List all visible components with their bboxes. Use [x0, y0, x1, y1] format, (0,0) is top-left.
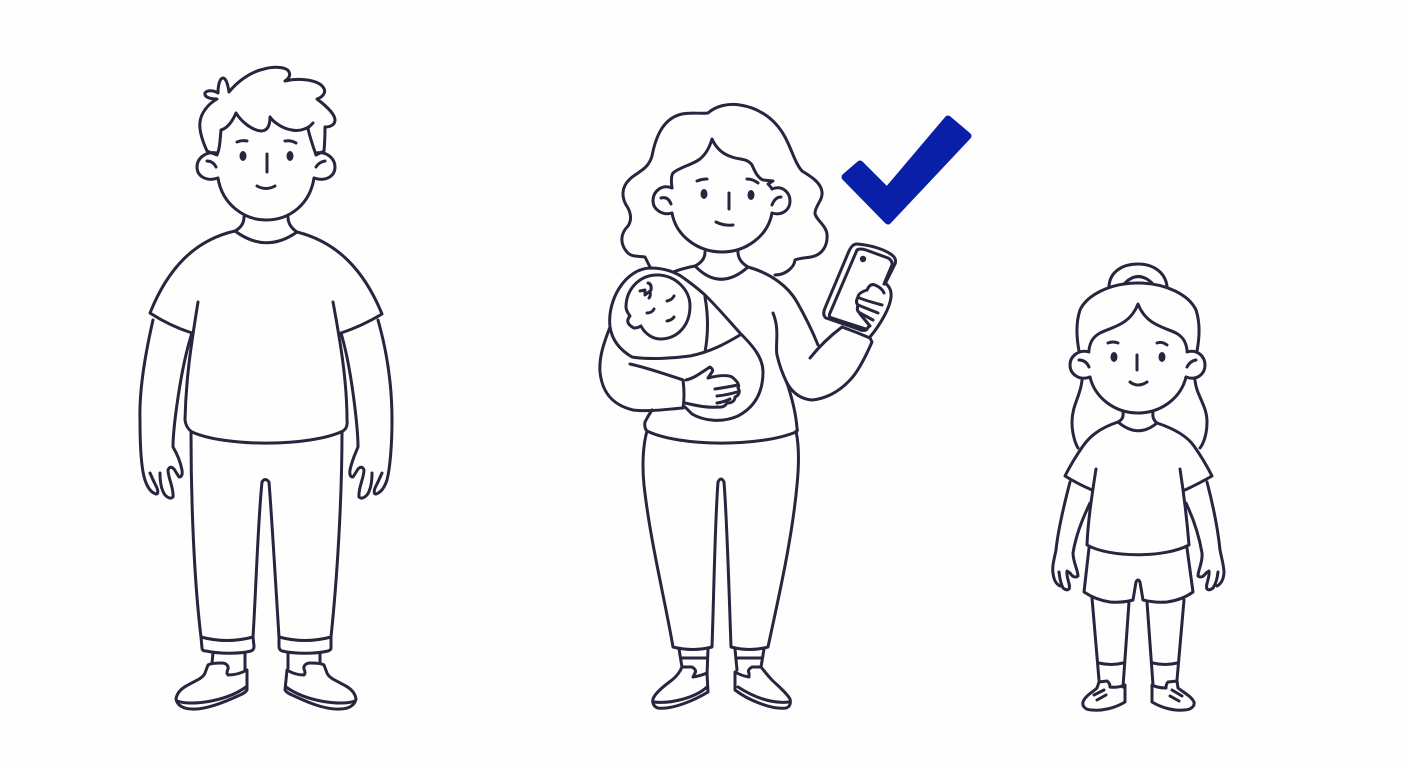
woman sweater — [645, 252, 842, 443]
man arms and hands — [140, 320, 392, 498]
man ears — [197, 153, 335, 179]
icon: blue check mark — [845, 119, 968, 221]
woman holding hand — [685, 367, 739, 407]
phone hand — [856, 283, 891, 337]
man trousers — [191, 432, 342, 653]
girl shorts — [1084, 548, 1193, 602]
baby wrap — [610, 268, 763, 420]
woman face — [672, 179, 772, 252]
man face — [218, 141, 314, 220]
man hair — [200, 67, 335, 155]
figure: man — [140, 67, 392, 709]
man t-shirt — [150, 217, 382, 443]
woman holding arm — [600, 327, 684, 411]
girl t-shirt — [1065, 413, 1212, 555]
girl ponytail — [1109, 264, 1167, 286]
woman socks and shoes — [653, 649, 790, 708]
woman raised forearm — [787, 327, 872, 400]
girl shoes — [1083, 681, 1194, 710]
girl legs and socks — [1092, 598, 1184, 687]
baby head — [626, 275, 690, 339]
man shoes and socks — [176, 653, 356, 709]
woman hairline — [671, 139, 773, 189]
woman hair — [622, 104, 827, 275]
figure: girl — [1053, 264, 1224, 710]
girl ears — [1070, 351, 1205, 378]
girl arms and hands — [1053, 482, 1224, 590]
phone — [824, 244, 896, 330]
woman ears — [653, 187, 790, 214]
girl hair — [1072, 283, 1207, 448]
girl face — [1090, 342, 1186, 413]
woman trousers — [643, 431, 798, 650]
figure: woman with baby — [600, 104, 896, 708]
